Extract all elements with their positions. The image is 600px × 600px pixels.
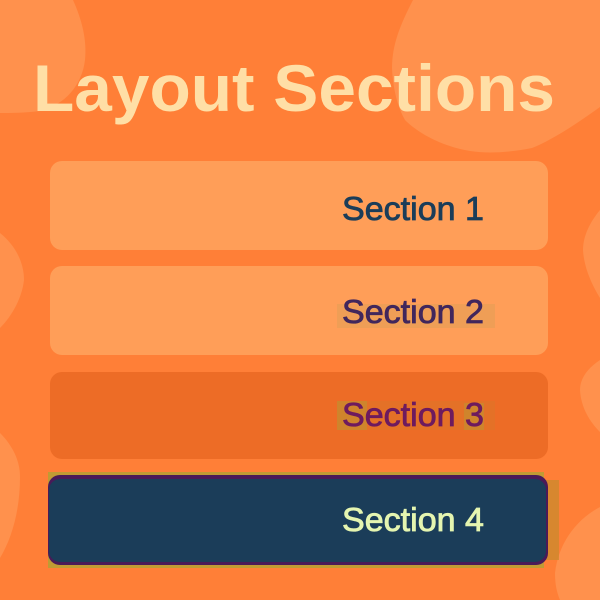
label: section 3: Section 3	[342, 396, 484, 433]
panel: section 3	[50, 372, 548, 459]
panel: section 2	[50, 266, 548, 355]
label: section 4: Section 4	[342, 501, 484, 538]
label: section 1: Section 1	[342, 190, 484, 227]
label: section 2: Section 2	[342, 293, 484, 330]
panel: section 4	[48, 472, 559, 568]
panel: section 1	[50, 161, 548, 250]
title: Layout Sections	[33, 51, 555, 125]
